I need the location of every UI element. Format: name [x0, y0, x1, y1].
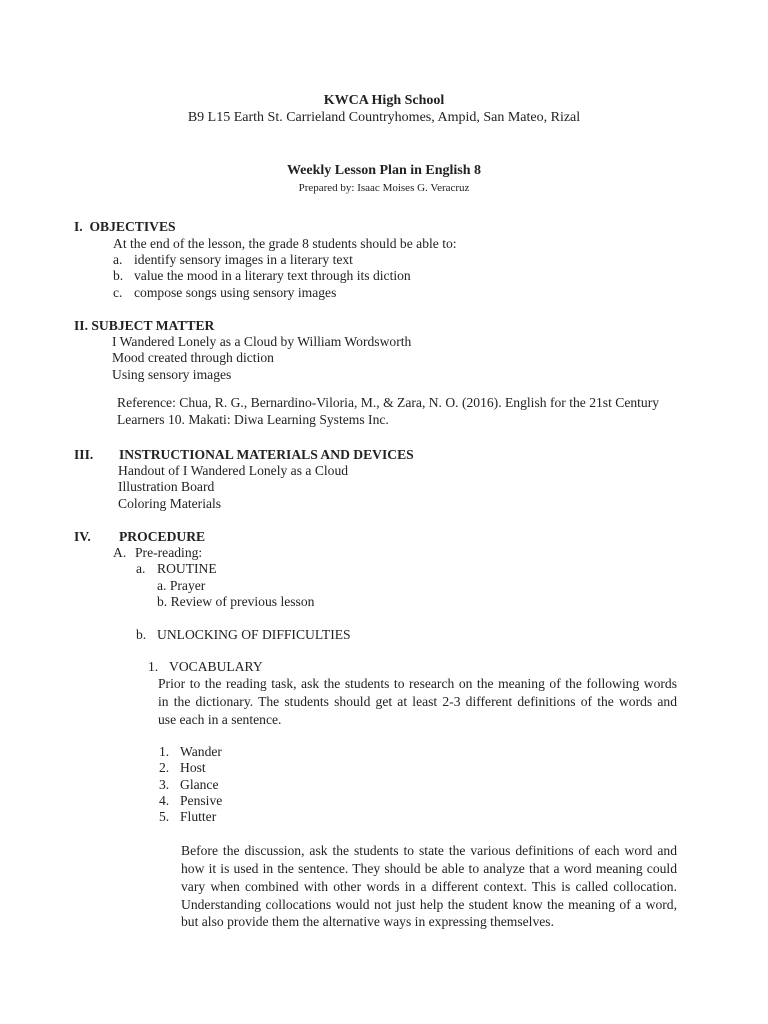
section IV: procedure: how it is used in the sentence. They should be able to analyze that a word meaning could [181, 861, 677, 876]
section IV: procedure: b. [136, 627, 146, 642]
section IV: procedure: ROUTINE [157, 561, 217, 576]
section I: objectives: a. [113, 252, 122, 267]
section IV: procedure: Pensive [180, 793, 222, 808]
section II: subject matter [74, 318, 659, 427]
section II: subject matter: Reference: Chua, R. G., Bernardino-Viloria, M., & Zara, N. O. (2016). English for the 21st Century [117, 395, 659, 410]
section IV: procedure: 4. [159, 793, 169, 808]
section IV: procedure [74, 529, 677, 929]
header: address: B9 L15 Earth St. Carrieland Countryhomes, Ampid, San Mateo, Rizal [188, 110, 580, 125]
section IV: procedure: UNLOCKING OF DIFFICULTIES [157, 627, 351, 642]
section IV: procedure: 5. [159, 809, 169, 824]
section IV: procedure: 2. [159, 760, 169, 775]
section II: subject matter: Learners 10. Makati: Diwa Learning Systems Inc. [117, 412, 389, 427]
section IV: procedure: VOCABULARY [169, 659, 263, 674]
discussion paragraph: Before the discussion, ask the students to state the various definitions of each word and [181, 843, 677, 858]
section IV: procedure: a. Prayer [157, 578, 205, 593]
section II: subject matter: II. SUBJECT MATTER [74, 318, 214, 333]
section I: objectives: compose songs using sensory images [134, 285, 336, 300]
vocabulary word list: 1. [159, 744, 169, 759]
section I: objectives [74, 219, 457, 300]
section IV: procedure: in the dictionary. The students should get at least 2-3 different definitions of the words and [158, 694, 677, 709]
section I: objectives: identify sensory images in a literary text [134, 252, 353, 267]
section III: instructional materials: Illustration Board [118, 479, 214, 494]
section III: instructional materials [74, 447, 414, 511]
section IV: procedure: use each in a sentence. [158, 712, 281, 727]
section III: instructional materials: Coloring Materials [118, 496, 221, 511]
section IV: procedure: Glance [180, 777, 218, 792]
section IV: procedure: IV. [74, 529, 91, 544]
section IV: procedure: vary when combined with other words in a different context. This is called collocation. [181, 879, 677, 894]
header: school name: KWCA High School [324, 93, 444, 108]
section III: instructional materials: INSTRUCTIONAL MATERIALS AND DEVICES [119, 447, 414, 462]
section IV: procedure: A. [113, 545, 126, 560]
section IV: procedure: Host [180, 760, 206, 775]
section II: subject matter: Using sensory images [112, 367, 231, 382]
section IV: procedure: 1. [148, 659, 158, 674]
section I: objectives: At the end of the lesson, the grade 8 students should be able to: [113, 236, 457, 251]
section III: instructional materials: III. [74, 447, 93, 462]
section III: instructional materials: Handout of I Wandered Lonely as a Cloud [118, 463, 348, 478]
section IV: procedure: Wander [180, 744, 222, 759]
section IV: procedure: Flutter [180, 809, 216, 824]
section II: subject matter: I Wandered Lonely as a Cloud by William Wordsworth [112, 334, 411, 349]
section IV: procedure: b. Review of previous lesson [157, 594, 314, 609]
section IV: procedure: 3. [159, 777, 169, 792]
section IV: procedure: a. [136, 561, 145, 576]
section I: objectives: I. OBJECTIVES [74, 219, 176, 234]
section IV: procedure: PROCEDURE [119, 529, 205, 544]
section I: objectives: b. [113, 268, 123, 283]
title: Weekly Lesson Plan in English 8 [287, 163, 481, 178]
section IV: procedure: Understanding collocations would not just help the student know the meaning of a word, [181, 897, 677, 912]
vocabulary instructions: Prior to the reading task, ask the students to research on the meaning of the following words [158, 676, 677, 691]
section IV: procedure: Pre-reading: [135, 545, 202, 560]
section I: objectives: c. [113, 285, 122, 300]
section II: subject matter: Mood created through diction [112, 350, 274, 365]
section IV: procedure: but also provide them the alternative ways in expressing themselves. [181, 914, 554, 929]
section I: objectives: value the mood in a literary text through its diction [134, 268, 411, 283]
subtitle: prepared by: Prepared by: Isaac Moises G. Veracruz [299, 182, 469, 194]
